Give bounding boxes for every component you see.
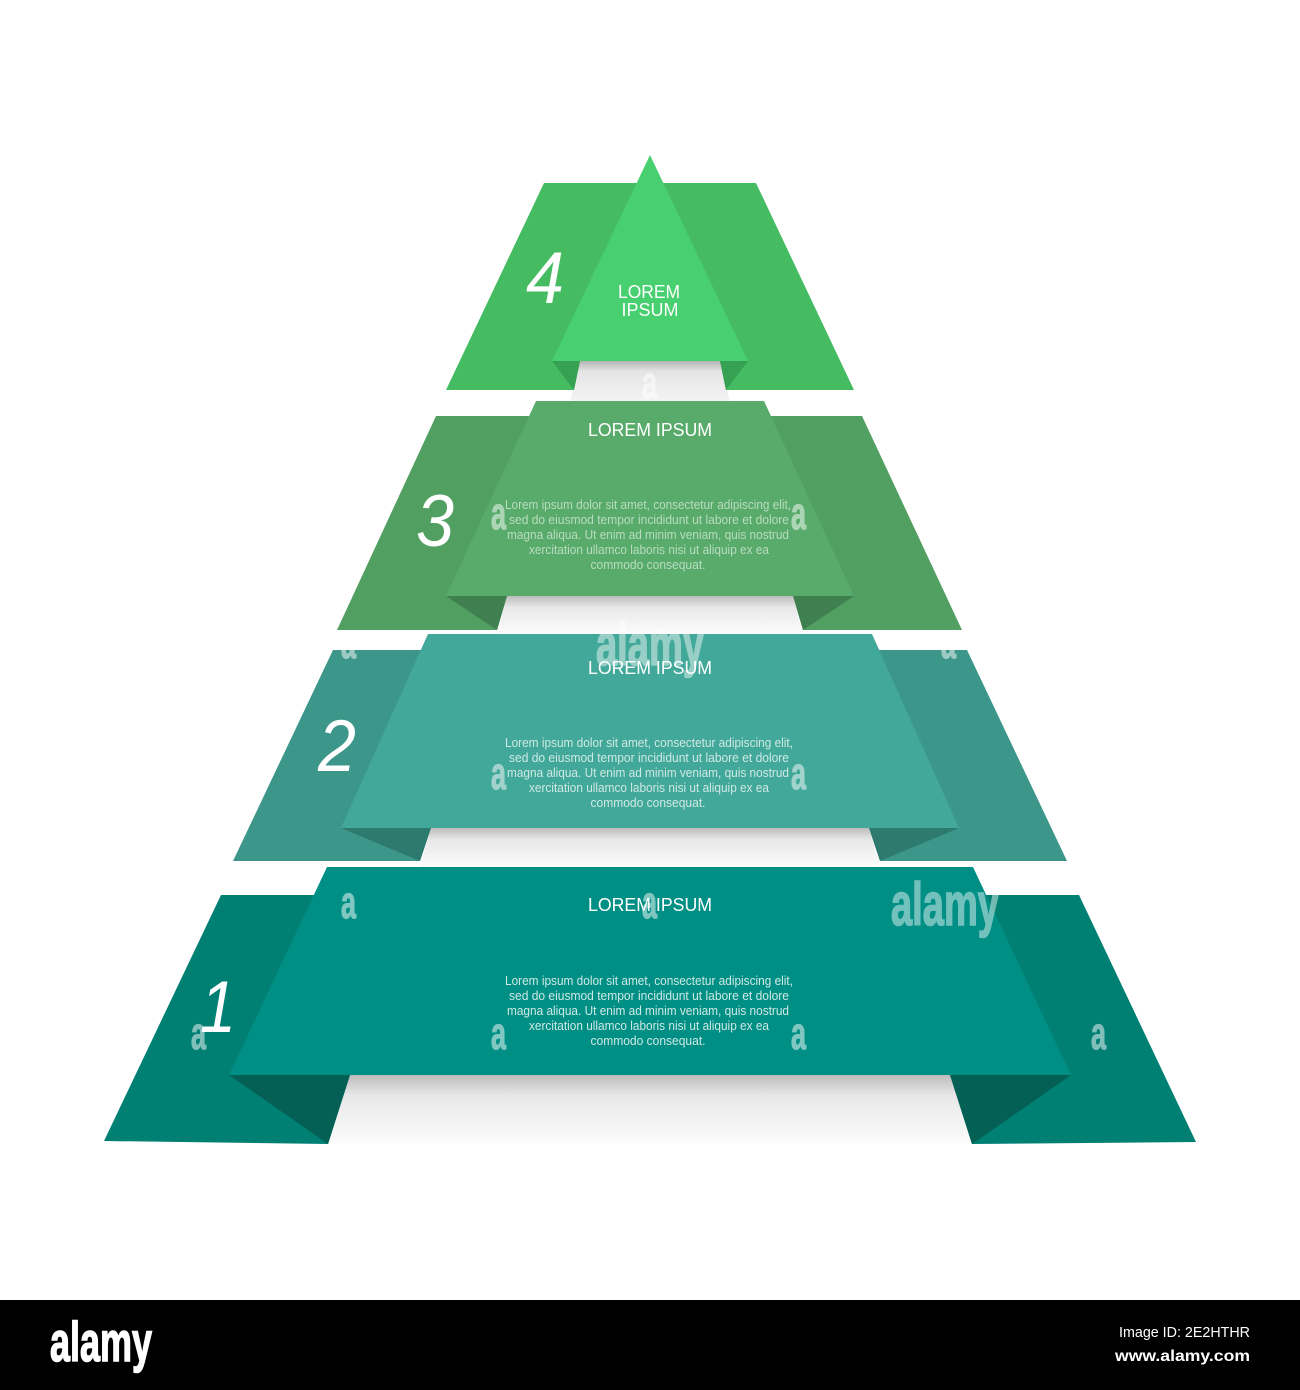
number 1: 1 bbox=[200, 967, 236, 1048]
small watermark letters: a bbox=[941, 617, 957, 668]
small watermark letters: a bbox=[1091, 1008, 1107, 1059]
right fold tier 1 bbox=[950, 1075, 1071, 1144]
back band tier 1 bbox=[104, 895, 1196, 1144]
back band tier 2 bbox=[233, 650, 1067, 861]
small watermark letters: a bbox=[791, 1008, 807, 1059]
tier 3 bbox=[337, 401, 962, 634]
left fold tier 4 bbox=[552, 361, 580, 390]
body text tier 2: sed do eiusmod tempor incididunt ut labore et dolore bbox=[509, 751, 789, 765]
footer bar bbox=[0, 1300, 1300, 1390]
tier 2 bbox=[233, 611, 1067, 867]
heading tier 1: LOREM IPSUM bbox=[588, 894, 712, 915]
tier 4: apex of pyramid bbox=[446, 155, 854, 402]
website: www.alamy.com bbox=[1114, 1348, 1250, 1365]
small watermark letter behind number 1: a bbox=[191, 1008, 207, 1059]
number 2: 2 bbox=[317, 706, 356, 787]
footer logo: alamy bbox=[50, 1310, 152, 1373]
tier 1: base of pyramid bbox=[104, 867, 1196, 1144]
body text tier 2: commodo consequat. bbox=[590, 796, 706, 810]
front band tier 1 bbox=[229, 867, 1071, 1075]
shadow under tier 4 bbox=[570, 361, 730, 402]
body text tier 3: xercitation ullamco laboris nisi ut aliquip ex ea bbox=[529, 543, 769, 557]
small watermark letters: a bbox=[491, 748, 507, 799]
body text tier 2: magna aliqua. Ut enim ad minim veniam, quis nostrud bbox=[507, 766, 789, 780]
small watermark letters: a bbox=[791, 748, 807, 799]
front band tier 2 bbox=[341, 634, 959, 828]
body text tier 1: magna aliqua. Ut enim ad minim veniam, quis nostrud bbox=[507, 1004, 789, 1018]
image id: Image ID: 2E2HTHR bbox=[1119, 1324, 1250, 1341]
body text tier 3: Lorem ipsum dolor sit amet, consectetur adipiscing elit, bbox=[505, 498, 791, 512]
heading tier 4 bbox=[618, 281, 680, 320]
watermark on tier 2: alamy bbox=[596, 611, 704, 678]
small watermark letters: a bbox=[341, 877, 357, 928]
number 3: 3 bbox=[416, 481, 454, 562]
body text tier 2: Lorem ipsum dolor sit amet, consectetur adipiscing elit, bbox=[505, 736, 793, 750]
body text tier 2 bbox=[505, 736, 793, 810]
left fold tier 3 bbox=[446, 596, 507, 630]
body text tier 1 bbox=[505, 974, 793, 1048]
heading tier 2: LOREM IPSUM bbox=[588, 657, 712, 678]
front triangle tier 4 bbox=[552, 155, 748, 361]
small watermark letters: a bbox=[341, 617, 357, 668]
body text tier 1: Lorem ipsum dolor sit amet, consectetur adipiscing elit, bbox=[505, 974, 793, 988]
small watermark letters: a bbox=[642, 877, 658, 928]
small watermark letters: a bbox=[491, 1008, 507, 1059]
right fold tier 4 bbox=[720, 361, 748, 390]
watermark on tier 1: alamy bbox=[891, 871, 999, 938]
body text tier 3: commodo consequat. bbox=[590, 558, 706, 572]
shadow under tier 3 bbox=[497, 596, 803, 634]
back band tier 4 bbox=[446, 183, 854, 390]
left fold tier 1 bbox=[229, 1075, 350, 1144]
heading tier 4: IPSUM bbox=[622, 299, 678, 320]
number 4: 4 bbox=[526, 238, 564, 319]
right fold tier 2 bbox=[869, 828, 959, 861]
body text tier 3 bbox=[505, 498, 791, 572]
body text tier 1: sed do eiusmod tempor incididunt ut labore et dolore bbox=[509, 989, 789, 1003]
small watermark letters: a bbox=[791, 488, 807, 539]
heading tier 4: LOREM bbox=[618, 281, 680, 302]
body text tier 1: commodo consequat. bbox=[590, 1034, 706, 1048]
small watermark letters: a bbox=[642, 357, 658, 408]
shadow under tier 1 bbox=[328, 1075, 972, 1144]
body text tier 1: xercitation ullamco laboris nisi ut aliquip ex ea bbox=[529, 1019, 769, 1033]
back band tier 3 bbox=[337, 416, 962, 630]
small watermark letters bbox=[341, 357, 1107, 1059]
front band tier 3 bbox=[446, 401, 854, 596]
body text tier 2: xercitation ullamco laboris nisi ut aliquip ex ea bbox=[529, 781, 769, 795]
body text tier 3: magna aliqua. Ut enim ad minim veniam, quis nostrud bbox=[507, 528, 789, 542]
body text tier 3: sed do eiusmod tempor incididunt ut labore et dolore bbox=[509, 513, 789, 527]
shadow under tier 2 bbox=[420, 828, 880, 867]
right fold tier 3 bbox=[793, 596, 854, 630]
left fold tier 2 bbox=[341, 828, 431, 861]
small watermark letters: a bbox=[491, 488, 507, 539]
heading tier 3: LOREM IPSUM bbox=[588, 419, 712, 440]
